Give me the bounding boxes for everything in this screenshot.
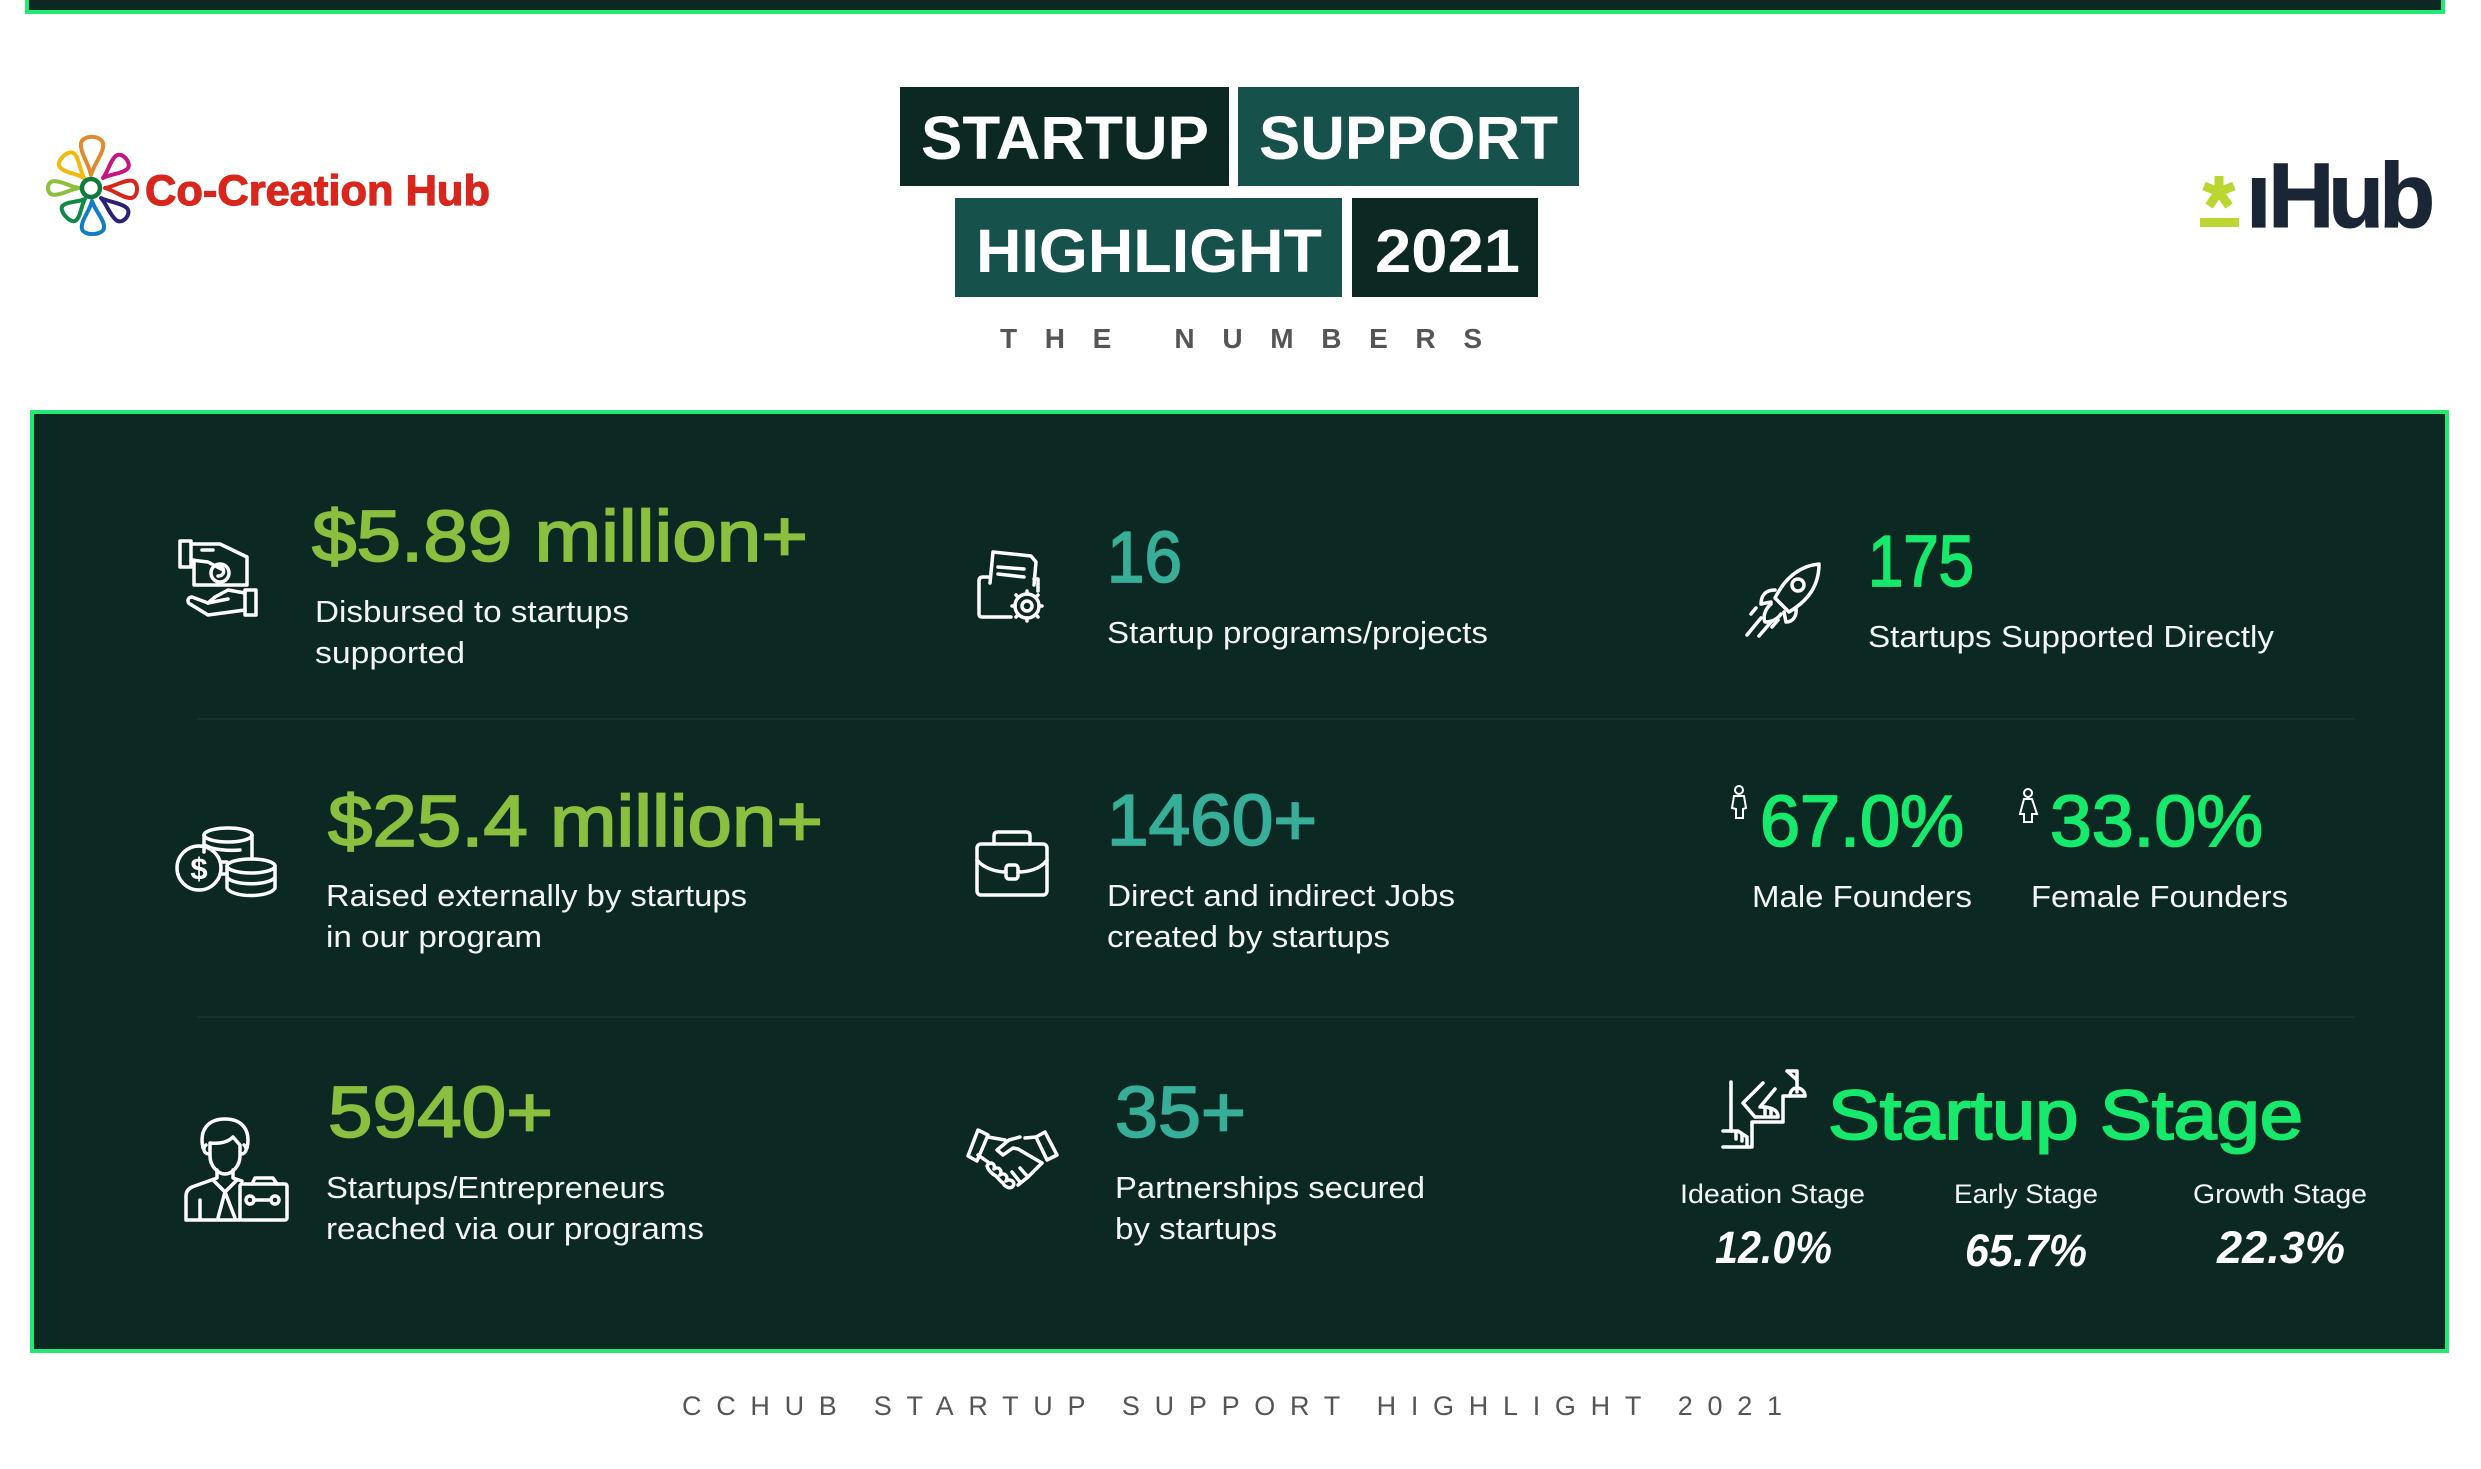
title box: HIGHLIGHT xyxy=(955,198,1342,297)
stage: early: Early Stage xyxy=(1954,1179,2098,1209)
value: 1460+ xyxy=(1107,781,1317,861)
stage: early: 65.7% xyxy=(1965,1225,2087,1276)
description: Startups Supported Directly xyxy=(1868,619,2275,654)
stage: growth xyxy=(2193,1179,2367,1273)
icon: dollar sign: $ xyxy=(190,851,208,886)
icon: hand with money xyxy=(180,541,256,615)
description: Disbursed to startups xyxy=(315,594,629,629)
top band xyxy=(27,0,2443,12)
logo wordmark: iHub xyxy=(2246,145,2435,247)
title box: SUPPORT: SUPPORT xyxy=(1259,104,1558,172)
stat: entrepreneurs xyxy=(186,1073,704,1246)
value: 67.0% xyxy=(1760,782,1964,862)
logo wordmark: Co-Creation Hub xyxy=(145,167,490,215)
stat: jobs xyxy=(977,781,1455,954)
section: startup stage xyxy=(1680,1071,2367,1276)
stat: partnerships xyxy=(968,1073,1425,1246)
footer: CCHUB STARTUP SUPPORT HIGHLIGHT 2021 xyxy=(682,1391,1782,1421)
stage: ideation xyxy=(1680,1179,1865,1273)
stat: startups supported xyxy=(1747,522,2275,654)
title box: 2021 xyxy=(1352,198,1538,297)
subtitle: THE NUMBERS xyxy=(1000,323,1482,354)
icon: rocket xyxy=(1747,564,1819,636)
stat: disbursed: supported xyxy=(315,635,465,670)
icon: briefcase xyxy=(977,832,1047,895)
stat: disbursed xyxy=(180,497,808,670)
value: $25.4 million+ xyxy=(328,782,823,862)
value: 16 xyxy=(1107,518,1182,598)
stat: raised: in our program xyxy=(326,919,542,954)
icon: handshake xyxy=(968,1130,1057,1188)
description: Startups/Entrepreneurs xyxy=(326,1170,665,1205)
stat: entrepreneurs: reached via our programs xyxy=(326,1211,704,1246)
icon: climbing stairs xyxy=(1723,1071,1805,1147)
logo: Co-Creation Hub xyxy=(48,137,490,234)
icon: male figure xyxy=(1732,786,1746,818)
icon: asterisk xyxy=(2200,176,2239,227)
stat: jobs: created by startups xyxy=(1107,919,1390,954)
stage: ideation: 12.0% xyxy=(1715,1222,1832,1273)
title block xyxy=(900,87,1579,297)
logo: iHub xyxy=(2200,145,2435,247)
stage: growth: Growth Stage xyxy=(2193,1179,2367,1209)
value: 175 xyxy=(1868,522,1974,602)
description: Male Founders xyxy=(1752,879,1972,914)
value: 33.0% xyxy=(2050,782,2263,862)
title box: 2021: 2021 xyxy=(1375,217,1520,285)
icon: flower xyxy=(48,137,137,234)
icon: coins xyxy=(177,828,275,896)
stat: programs xyxy=(979,518,1488,650)
stat: raised xyxy=(177,782,823,954)
stat: female founders xyxy=(2020,782,2288,914)
title box: SUPPORT xyxy=(1238,87,1579,186)
value: $5.89 million+ xyxy=(312,497,808,577)
panel: main stats xyxy=(32,412,2447,1351)
description: Female Founders xyxy=(2031,879,2288,914)
stage: ideation: Ideation Stage xyxy=(1680,1179,1865,1209)
title box: STARTUP xyxy=(900,87,1229,186)
description: Startup programs/projects xyxy=(1107,615,1488,650)
stage: early xyxy=(1954,1179,2098,1276)
icon: folder with gear xyxy=(979,552,1042,621)
description: Partnerships secured xyxy=(1115,1170,1425,1205)
description: Raised externally by startups xyxy=(326,878,747,913)
panel background xyxy=(32,412,2447,1351)
stat: male founders xyxy=(1732,782,1972,914)
stage: growth: 22.3% xyxy=(2216,1222,2345,1273)
icon: female figure xyxy=(2020,789,2037,822)
icon: person with case xyxy=(186,1119,287,1220)
description: Direct and indirect Jobs xyxy=(1107,878,1455,913)
heading: Startup Stage xyxy=(1828,1076,2303,1154)
stat: partnerships: by startups xyxy=(1115,1211,1277,1246)
title box: STARTUP: STARTUP xyxy=(921,104,1209,172)
value: 5940+ xyxy=(328,1073,553,1153)
value: 35+ xyxy=(1115,1073,1246,1153)
title box: HIGHLIGHT: HIGHLIGHT xyxy=(976,217,1322,285)
